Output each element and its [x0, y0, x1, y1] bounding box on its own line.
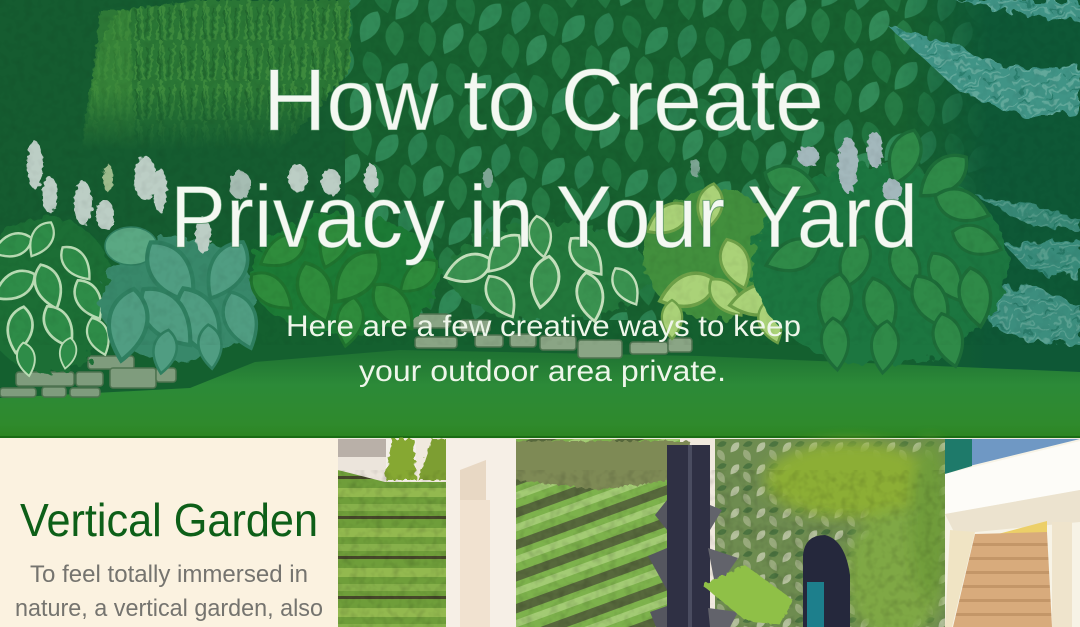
title line 2: Privacy in Your Yard — [170, 167, 918, 266]
hero: green hosta middle — [243, 211, 444, 348]
photo: hanging green plant — [702, 565, 793, 625]
subtitle — [286, 310, 801, 388]
photo: building at right — [945, 439, 1080, 627]
photo: sloped planter rows — [515, 439, 680, 627]
hero: teal hosta — [100, 227, 266, 375]
photo: foliage texture — [338, 470, 945, 627]
hero: ornamental grasses top left — [0, 0, 350, 240]
hero: yellow-green hosta — [641, 182, 789, 347]
photo: variegated planting top — [515, 441, 690, 490]
hero: lawn — [0, 350, 1080, 438]
subtitle line 2: your outdoor area private. — [359, 355, 726, 388]
photo: white column — [446, 439, 516, 627]
body text: To feel totally immersed in — [30, 561, 308, 588]
hero: leafy wall — [300, 0, 1020, 320]
title line 1: How to Create — [263, 50, 824, 149]
hero: stone wall left — [0, 354, 176, 397]
hero: shaded area behind spruce — [900, 0, 1080, 380]
subtitle line 1: Here are a few creative ways to keep — [286, 310, 801, 343]
body text — [15, 561, 323, 622]
body text: nature, a vertical garden, also — [15, 595, 323, 622]
photo: left planted wall — [338, 470, 447, 627]
photo: vertical garden — [338, 438, 1080, 627]
photo: dark planter column — [648, 445, 738, 627]
hero: blue spruce tree — [890, 0, 1080, 345]
title — [170, 50, 918, 266]
hero: leaf texture — [0, 0, 1080, 345]
photo: arched blue door — [803, 535, 850, 627]
photo: variegated plant wall — [715, 439, 947, 627]
hero: variegated hosta left — [0, 217, 116, 377]
hero: large green hosta right — [752, 125, 1008, 374]
heading: Vertical Garden: Vertical Garden — [20, 494, 318, 546]
photo: bright green foliage — [765, 440, 950, 627]
hero: stone wall middle — [400, 314, 692, 358]
hero: white edged hosta — [441, 214, 648, 323]
hero photo: garden background — [0, 0, 1080, 438]
hero: lawn bottom edge — [0, 436, 1080, 438]
hero: hosta flowers — [27, 132, 902, 253]
panel: vertical garden text — [0, 438, 338, 627]
photo: building at left — [338, 439, 448, 481]
